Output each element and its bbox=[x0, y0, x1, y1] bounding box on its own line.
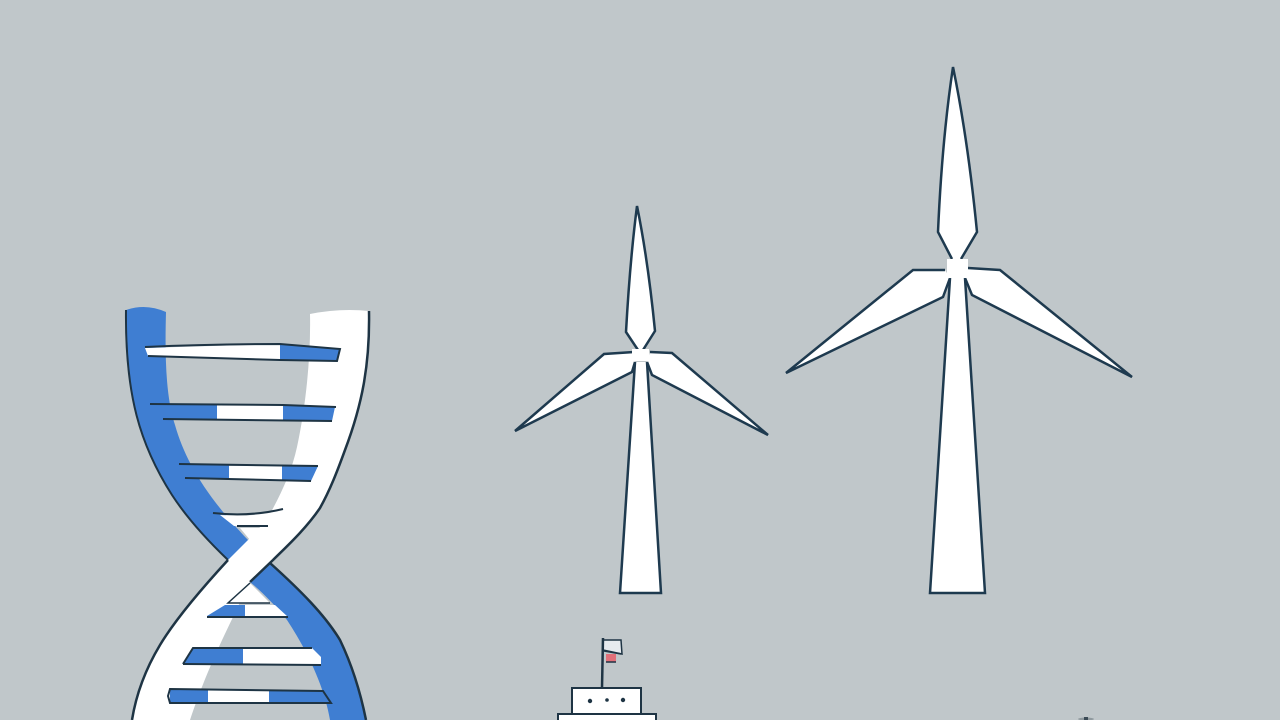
tower bbox=[930, 278, 985, 593]
rung 7 bbox=[168, 689, 331, 703]
left blade bbox=[786, 270, 950, 373]
icon: distant mark at bottom edge bbox=[1078, 717, 1094, 720]
icon: ship superstructure bbox=[558, 638, 656, 720]
cabin bbox=[572, 688, 641, 718]
rung 1 bbox=[145, 344, 340, 361]
left blade bbox=[515, 352, 635, 431]
flag bbox=[602, 638, 622, 688]
right blade bbox=[965, 268, 1132, 377]
blue strand bbox=[126, 307, 366, 720]
hub bbox=[947, 259, 968, 278]
rung 5 bbox=[207, 583, 288, 617]
icon: DNA double helix bbox=[126, 307, 369, 720]
icon: small wind turbine bbox=[515, 206, 768, 593]
portholes bbox=[588, 698, 625, 703]
rung 3 bbox=[179, 464, 318, 481]
rung 4 bbox=[213, 509, 283, 540]
hub bbox=[632, 349, 649, 361]
rung 6 bbox=[183, 648, 321, 665]
white strand bbox=[132, 310, 369, 720]
deck bbox=[558, 714, 656, 720]
rung 2 bbox=[150, 404, 336, 421]
icon: large wind turbine bbox=[786, 67, 1132, 593]
tower bbox=[620, 362, 661, 593]
upper blade bbox=[938, 67, 977, 259]
right blade bbox=[647, 352, 768, 435]
upper blade bbox=[626, 206, 655, 350]
